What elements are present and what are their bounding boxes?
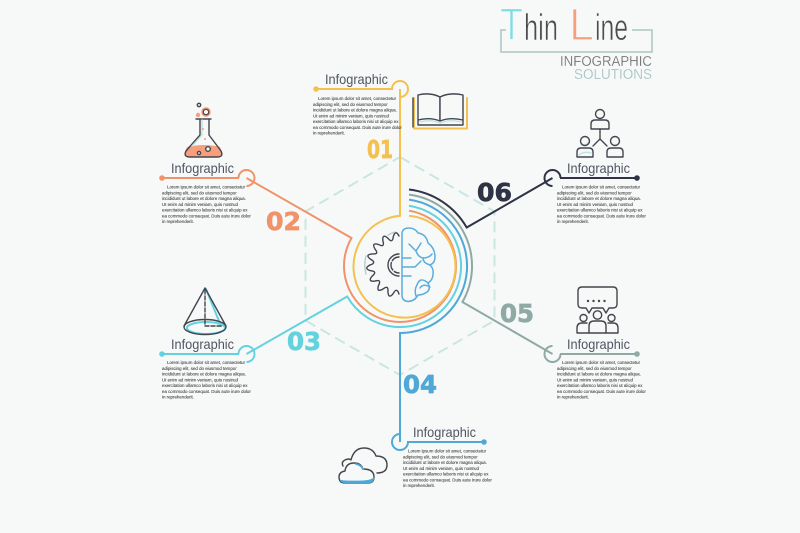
text 02: Ut enim ad minim veniam, quis nostrud bbox=[162, 202, 238, 207]
heading 04: Infographic bbox=[413, 424, 476, 440]
text 01: Lorem ipsum dolor sit amet, consectetur bbox=[318, 96, 397, 101]
text 03: Lorem ipsum dolor sit amet, consectetur bbox=[167, 360, 246, 365]
text 03: exercitation ullamco laboris nisi ut aliquip ex bbox=[162, 383, 248, 388]
heading 01: Infographic bbox=[325, 71, 388, 87]
dashed hexagon bbox=[306, 157, 494, 375]
number 06: 06 bbox=[477, 178, 512, 207]
connector 06 dark bbox=[409, 170, 640, 228]
text 05: ea commodo consequat. Duis aute irure dolor bbox=[557, 389, 646, 394]
text 04: ea commodo consequat. Duis aute irure dolor bbox=[403, 477, 492, 482]
title logo: L bbox=[569, 0, 594, 50]
text 06: adipiscing elit, sed do eiusmod tempor bbox=[557, 190, 632, 195]
text 04: exercitation ullamco laboris nisi ut aliquip ex bbox=[403, 472, 489, 476]
number 04: 04 bbox=[403, 370, 437, 399]
connector 02 orange bbox=[159, 170, 456, 322]
text 02: in reprehenderit. bbox=[162, 219, 194, 224]
text 01: Ut enim ad minim veniam, quis nostrud bbox=[313, 113, 389, 118]
icon: gear bbox=[365, 232, 399, 296]
text 05: exercitation ullamco laboris nisi ut aliquip ex bbox=[557, 383, 643, 388]
heading 02: Infographic bbox=[171, 160, 234, 176]
text 01: adipiscing elit, sed do eiusmod tempor bbox=[313, 102, 388, 107]
icon: audience speech bubble bbox=[577, 287, 618, 333]
block 02 bbox=[162, 103, 301, 236]
title logo: hin bbox=[524, 7, 558, 48]
icon: cone bbox=[184, 288, 226, 334]
text 04: adipiscing elit, sed do eiusmod tempor bbox=[403, 454, 478, 459]
icon: team hierarchy bbox=[577, 110, 623, 157]
text 06: in reprehenderit. bbox=[557, 219, 589, 224]
number 01: 01 bbox=[367, 135, 393, 164]
title logo bbox=[500, 0, 652, 83]
text 01: ea commodo consequat. Duis aute irure dolor bbox=[313, 125, 402, 130]
text 03: ea commodo consequat. Duis aute irure dolor bbox=[162, 389, 251, 394]
text 04: Lorem ipsum dolor sit amet, consectetur bbox=[408, 448, 487, 454]
text 05: adipiscing elit, sed do eiusmod tempor bbox=[557, 366, 632, 371]
text 03: Ut enim ad minim veniam, quis nostrud bbox=[162, 377, 238, 382]
text 02: Lorem ipsum dolor sit amet, consectetur bbox=[167, 184, 246, 190]
text 02: adipiscing elit, sed do eiusmod tempor bbox=[162, 190, 237, 195]
text 01: in reprehenderit. bbox=[313, 130, 345, 136]
connector 04 blue bbox=[392, 200, 487, 450]
number 02: 02 bbox=[266, 207, 301, 236]
icon: cloud bbox=[339, 448, 387, 483]
text 06: Lorem ipsum dolor sit amet, consectetur bbox=[562, 184, 641, 190]
block 03 bbox=[162, 288, 321, 400]
text 05: Ut enim ad minim veniam, quis nostrud bbox=[557, 377, 633, 382]
block 06 bbox=[477, 110, 646, 224]
text 02: incididunt ut labore et dolore magna aliqua. bbox=[162, 196, 246, 201]
heading 03: Infographic bbox=[171, 336, 234, 352]
title logo: ine bbox=[595, 7, 628, 48]
text 03: adipiscing elit, sed do eiusmod tempor bbox=[162, 366, 237, 371]
connector 05 gray bbox=[409, 195, 640, 362]
text 02: exercitation ullamco laboris nisi ut aliquip ex bbox=[162, 208, 248, 212]
icon: brain bbox=[402, 228, 435, 302]
connector 01 yellow bbox=[313, 81, 456, 318]
icon: book bbox=[413, 94, 467, 128]
text 05: in reprehenderit. bbox=[557, 394, 589, 400]
text 05: Lorem ipsum dolor sit amet, consectetur bbox=[562, 360, 641, 365]
text 06: ea commodo consequat. Duis aute irure dolor bbox=[557, 213, 646, 218]
block 01 bbox=[313, 71, 402, 164]
title logo: INFOGRAPHIC bbox=[560, 53, 652, 70]
text 03: incididunt ut labore et dolore magna aliqua. bbox=[162, 372, 246, 376]
icon: flask bbox=[185, 103, 222, 157]
text 04: incididunt ut labore et dolore magna aliqua. bbox=[403, 460, 487, 465]
block 04 bbox=[339, 370, 492, 488]
text 06: exercitation ullamco laboris nisi ut aliquip ex bbox=[557, 208, 643, 212]
title logo: SOLUTIONS bbox=[574, 66, 652, 83]
text 06: incididunt ut labore et dolore magna aliqua. bbox=[557, 196, 641, 201]
text 01: incididunt ut labore et dolore magna aliqua. bbox=[313, 108, 397, 112]
title logo: T bbox=[500, 0, 523, 50]
heading 06: Infographic bbox=[567, 160, 630, 176]
text 06: Ut enim ad minim veniam, quis nostrud bbox=[557, 202, 633, 207]
text 05: incididunt ut labore et dolore magna aliqua. bbox=[557, 372, 641, 376]
number 03: 03 bbox=[287, 327, 321, 356]
block 05 bbox=[500, 287, 646, 400]
number 05: 05 bbox=[500, 299, 534, 328]
text 03: in reprehenderit. bbox=[162, 394, 194, 400]
text 04: in reprehenderit. bbox=[403, 483, 435, 488]
text 04: Ut enim ad minim veniam, quis nostrud bbox=[403, 466, 479, 471]
text 01: exercitation ullamco laboris nisi ut aliquip ex bbox=[313, 119, 399, 124]
text 02: ea commodo consequat. Duis aute irure dolor bbox=[162, 213, 251, 218]
connector 03 teal bbox=[159, 206, 461, 362]
heading 05: Infographic bbox=[567, 336, 630, 352]
